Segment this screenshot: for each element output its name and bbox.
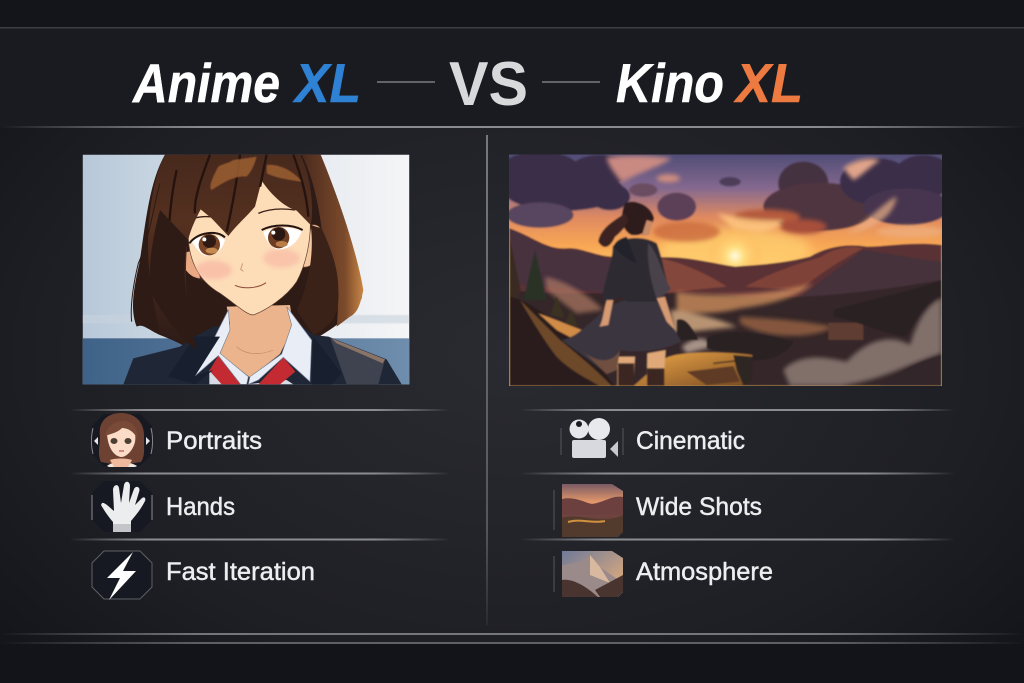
heading: Kino XL [616, 52, 803, 114]
panel: cinematic landscape illustration [500, 150, 953, 390]
list: Kino XL strengths [520, 409, 955, 597]
list: Anime XL strengths [70, 409, 450, 600]
heading: Kino XL: XL [733, 52, 803, 114]
icon: atmosphere thumbnail [554, 551, 623, 597]
label: Cinematic: Cinematic [636, 427, 745, 455]
icon: lightning bolt [92, 551, 152, 600]
icon: wide shot thumbnail [554, 484, 623, 537]
label: Atmosphere: Atmosphere [636, 558, 773, 586]
connector left [377, 81, 435, 83]
panel: anime portrait illustration [83, 155, 409, 385]
icon: portrait [92, 413, 152, 467]
label: Wide Shots: Wide Shots [636, 493, 762, 521]
label: Hands: Hands [166, 493, 235, 521]
heading: Kino XL: Kino [616, 52, 724, 114]
label: Fast Iteration: Fast Iteration [166, 558, 315, 586]
connector right [542, 81, 600, 83]
title [131, 50, 803, 119]
heading: VS: VS [449, 50, 528, 119]
heading: Anime XL: Anime [131, 52, 280, 114]
heading: Anime XL: XL [292, 52, 361, 114]
icon: movie camera [561, 418, 623, 458]
label: Portraits: Portraits [166, 427, 262, 455]
icon: hand [92, 481, 152, 532]
